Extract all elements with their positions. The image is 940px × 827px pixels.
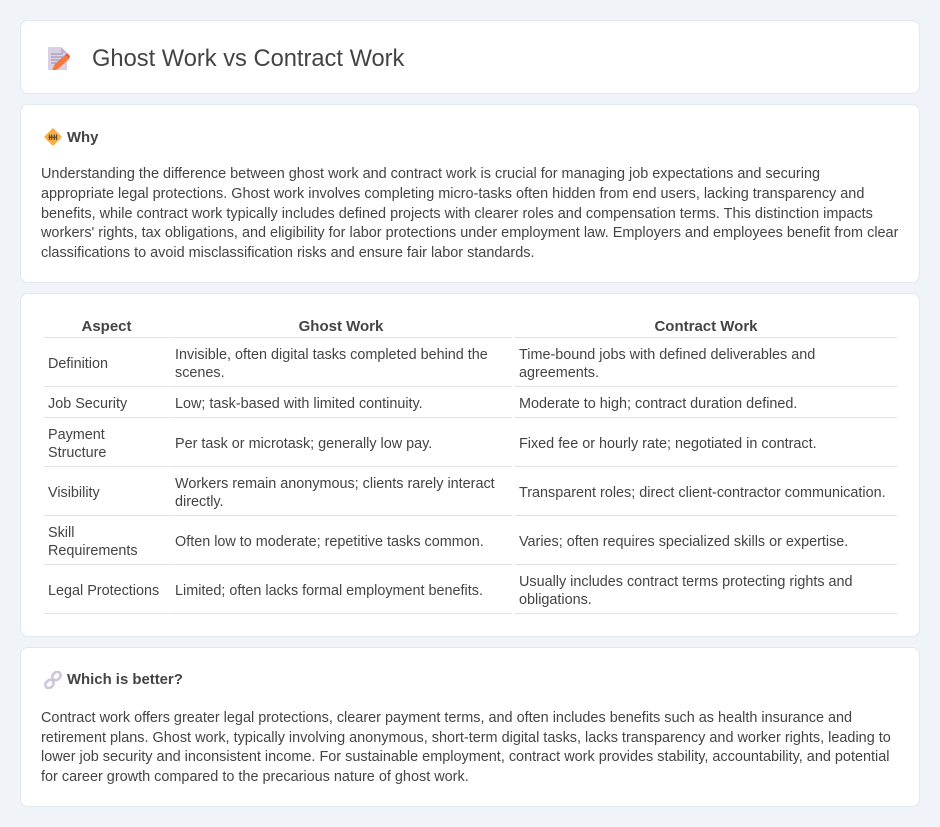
heading: why: Why: [67, 130, 98, 146]
text block: why explanation: [41, 166, 898, 261]
text block: verdict: lower job security and inconsistent income. For sustainable employment, contract work provides stability, accountability, and potential: [41, 749, 889, 765]
row: legal protections: Limited; often lacks formal employment benefits.: [175, 583, 483, 599]
row: definition: [48, 347, 815, 381]
title: Ghost Work vs Contract Work: [92, 46, 404, 72]
row: job security: Job Security: [48, 396, 127, 412]
row: skill requirements: Skill: [48, 525, 74, 541]
heading: which is better: Which is better?: [67, 672, 183, 688]
row: visibility: [48, 476, 886, 510]
row: definition: Time-bound jobs with defined deliverables and: [519, 347, 815, 363]
row: visibility: Workers remain anonymous; clients rarely interact: [175, 476, 495, 492]
row: skill requirements: [48, 525, 848, 559]
row: payment structure: Payment: [48, 427, 105, 443]
row: skill requirements: Requirements: [48, 543, 138, 559]
text block: verdict: retirement plans. Ghost work, typically involving anonymous, short-term digital tasks, lacks transparency and worker rights, leading to: [41, 730, 891, 746]
row: payment structure: [48, 427, 817, 461]
row: payment structure: Structure: [48, 445, 106, 461]
row: payment structure: Fixed fee or hourly rate; negotiated in contract.: [519, 436, 817, 452]
table header: Aspect: [81, 318, 132, 335]
row: definition: Definition: [48, 356, 108, 372]
text block: verdict: [41, 710, 891, 785]
icon: diamond road sign: [44, 128, 62, 146]
text block: why explanation: appropriate legal protections. Ghost work involves completing micro-tasks often hidden from end users, lacking transparency and: [41, 186, 864, 202]
row: visibility: Visibility: [48, 485, 100, 501]
table header: Contract Work: [654, 318, 758, 335]
row: job security: Moderate to high; contract duration defined.: [519, 396, 797, 412]
row: job security: Low; task-based with limited continuity.: [175, 396, 423, 412]
text block: verdict: Contract work offers greater legal protections, clearer payment terms, and often includes benefits such as health insurance and: [41, 710, 852, 726]
row: skill requirements: Often low to moderate; repetitive tasks common.: [175, 534, 484, 550]
row: definition: agreements.: [519, 365, 599, 381]
text block: why explanation: workers' rights, tax obligations, and eligibility for labor protections under employment law. Employers and employees benefit from clear: [41, 225, 898, 241]
panel: which is better: [20, 647, 920, 807]
row: visibility: directly.: [175, 494, 224, 510]
row: legal protections: Legal Protections: [48, 583, 159, 599]
row: legal protections: Usually includes contract terms protecting rights and: [519, 574, 853, 590]
table header: [81, 318, 758, 335]
row: definition: Invisible, often digital tasks completed behind the: [175, 347, 488, 363]
panel: why: [20, 104, 920, 283]
row: definition: scenes.: [175, 365, 225, 381]
row: payment structure: Per task or microtask; generally low pay.: [175, 436, 432, 452]
icon: chain link: [44, 671, 62, 689]
icon: document with pencil: [48, 47, 70, 70]
row: job security: [48, 396, 797, 412]
panel: comparison table: [20, 293, 920, 637]
row: skill requirements: Varies; often requires specialized skills or expertise.: [519, 534, 848, 550]
table header: Ghost Work: [299, 318, 383, 335]
text block: why explanation: benefits, while contract work typically includes defined projects with clearer roles and compensation terms. This distinction impacts: [41, 206, 873, 222]
text block: why explanation: classifications to avoid misclassification risks and ensure fair labor standards.: [41, 245, 534, 261]
text block: verdict: for career growth compared to the precarious nature of ghost work.: [41, 769, 469, 785]
row: legal protections: obligations.: [519, 592, 592, 608]
row: visibility: Transparent roles; direct client-contractor communication.: [519, 485, 886, 501]
panel: title header: [20, 20, 920, 94]
text block: why explanation: Understanding the difference between ghost work and contract work is crucial for managing job expectations and securing: [41, 166, 820, 182]
row: legal protections: [48, 574, 853, 608]
